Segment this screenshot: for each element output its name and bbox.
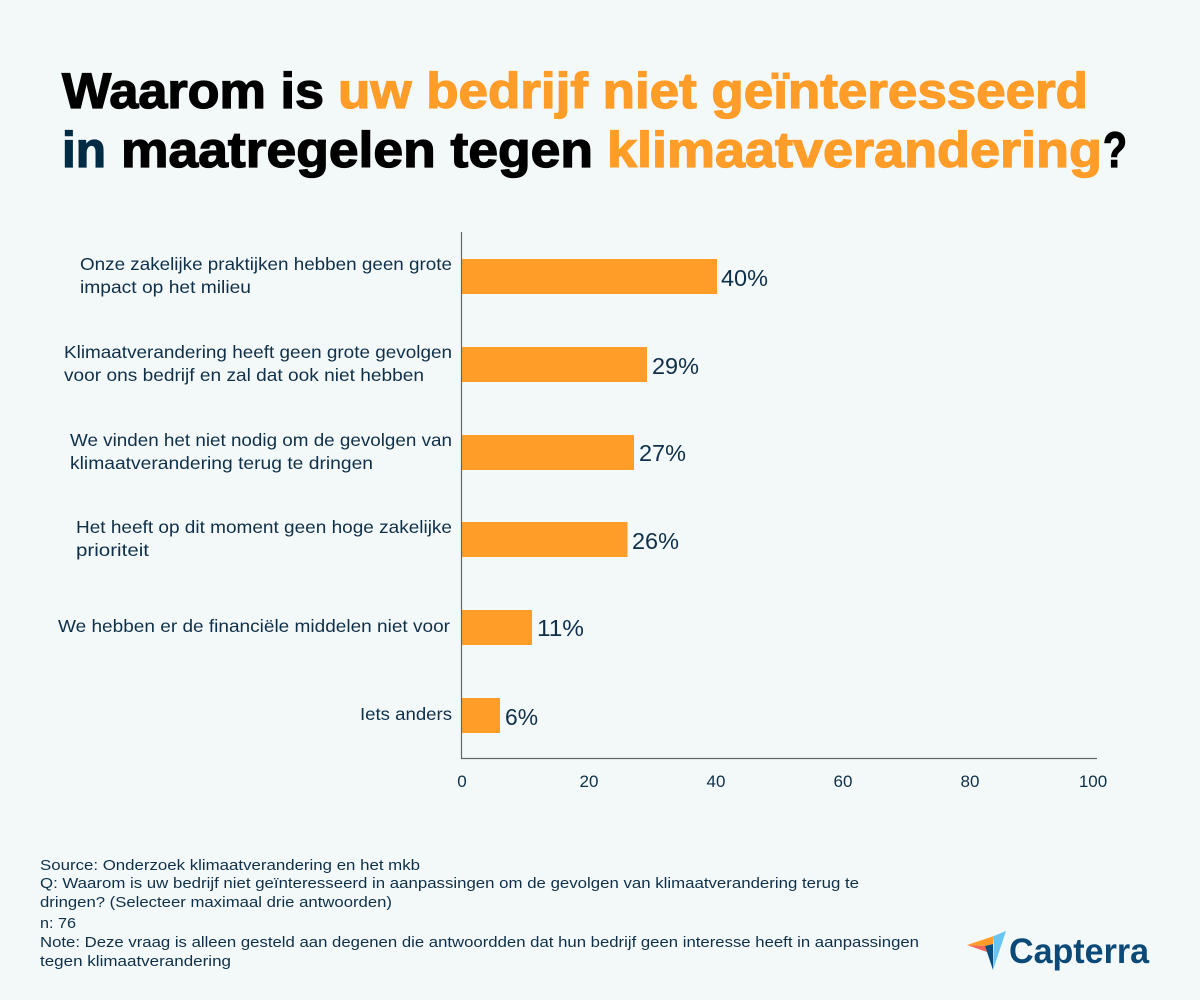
title: in xyxy=(62,122,106,178)
x axis labels: 60 xyxy=(834,772,852,791)
value 11%: 11% xyxy=(537,615,584,641)
value 6%: 6% xyxy=(505,704,538,730)
category label 1 xyxy=(80,254,452,297)
category label 4: prioriteit xyxy=(76,540,149,560)
axes xyxy=(462,232,1097,758)
category label 1: impact op het milieu xyxy=(80,277,251,297)
value 29%: 29% xyxy=(652,353,699,379)
category label 3 xyxy=(70,430,452,473)
footnote: Q: Waarom is uw bedrijf niet geïnteresseerd in aanpassingen om de gevolgen van klimaatverandering terug te xyxy=(40,875,859,892)
footnote xyxy=(40,857,919,970)
x axis labels: 40 xyxy=(707,772,725,791)
bar chart xyxy=(58,232,1107,791)
category label 2 xyxy=(64,342,452,385)
category label 2: voor ons bedrijf en zal dat ook niet hebben xyxy=(64,365,424,385)
category label 1: Onze zakelijke praktijken hebben geen grote xyxy=(80,254,452,274)
title: uw bedrijf niet geïnteresseerd xyxy=(338,63,1088,119)
footnote: n: 76 xyxy=(40,915,76,932)
x axis labels xyxy=(457,772,1107,791)
footnote: Source: Onderzoek klimaatverandering en het mkb xyxy=(40,857,420,874)
title: maatregelen tegen xyxy=(121,122,593,178)
category label 4: Het heeft op dit moment geen hoge zakelijke xyxy=(76,517,452,537)
bar 26% xyxy=(462,522,628,557)
x axis labels: 80 xyxy=(961,772,979,791)
title: klimaatverandering xyxy=(607,122,1102,178)
Capterra logo xyxy=(967,931,1150,971)
wordmark: Capterra xyxy=(1009,932,1150,971)
title: ? xyxy=(1103,122,1127,178)
bar 27% xyxy=(462,435,634,470)
bar 40% xyxy=(462,259,717,294)
footnote: Note: Deze vraag is alleen gesteld aan degenen die antwoordden dat hun bedrijf geen interesse heeft in aanpassingen xyxy=(40,934,919,951)
footnote: tegen klimaatverandering xyxy=(40,953,231,970)
category label 3: klimaatverandering terug te dringen xyxy=(70,453,373,473)
x axis labels: 100 xyxy=(1079,772,1107,791)
value 27%: 27% xyxy=(639,440,686,466)
x axis labels: 0 xyxy=(457,772,467,791)
category label 2: Klimaatverandering heeft geen grote gevolgen xyxy=(64,342,452,362)
category label 3: We vinden het niet nodig om de gevolgen van xyxy=(70,430,452,450)
bar 6% xyxy=(462,698,500,733)
category label 6: Iets anders xyxy=(360,704,452,724)
icon: Capterra arrow xyxy=(967,931,1006,970)
title xyxy=(62,63,1127,178)
title: Waarom is xyxy=(62,63,324,119)
bar 11% xyxy=(462,610,532,645)
bar 29% xyxy=(462,347,647,382)
value 40%: 40% xyxy=(721,265,768,291)
footnote: dringen? (Selecteer maximaal drie antwoorden) xyxy=(40,894,392,911)
value 26%: 26% xyxy=(632,528,679,554)
category label 4 xyxy=(76,517,452,560)
category label 5: We hebben er de financiële middelen niet voor xyxy=(58,616,450,636)
x axis labels: 20 xyxy=(580,772,598,791)
